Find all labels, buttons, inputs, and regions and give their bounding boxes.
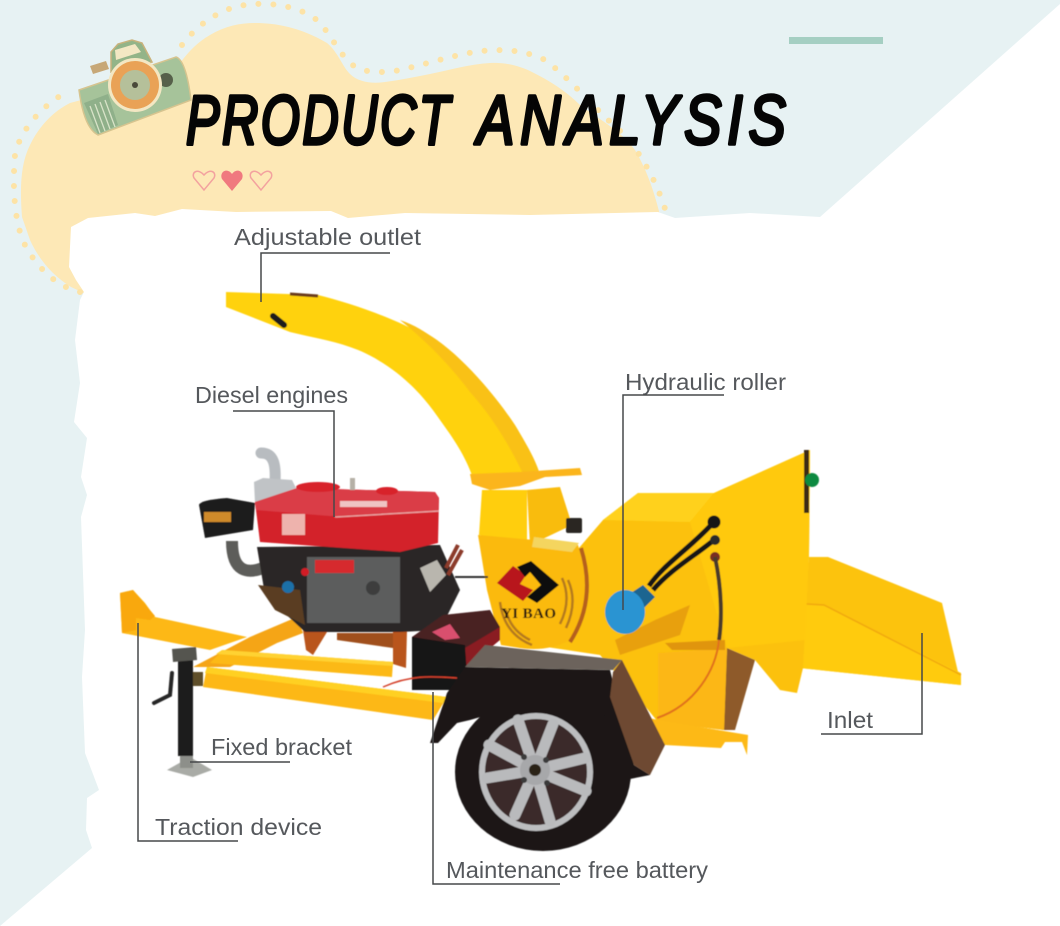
hopper inlet tray [790,557,961,685]
label: Diesel engines [195,382,348,517]
icon: three hearts [193,171,272,191]
logo: YI BAO [497,561,559,622]
label: Maintenance free battery: Maintenance free battery [446,857,709,883]
stand jack [154,647,212,777]
outlet transition [479,487,572,545]
label: Inlet: Inlet [827,707,874,733]
label: Inlet [821,633,922,734]
feed funnel body [500,450,810,730]
header blob: dotted outline [14,4,667,292]
tow frame [120,590,447,720]
flange [470,468,582,490]
blower housing [478,518,587,649]
base plate with hook [640,716,748,755]
label: Adjustable outlet [234,224,422,302]
logo: YI BAO: YI BAO [501,606,556,622]
label: Traction device: Traction device [155,814,322,840]
label: Hydraulic roller [623,369,786,610]
title [186,81,786,159]
fender [430,645,665,785]
diesel engine [199,453,488,648]
discharge chute [226,292,541,478]
header blob: cream shape [21,23,660,300]
title: ANALYSIS [473,82,786,159]
label: Fixed bracket: Fixed bracket [211,734,353,760]
accent bar [789,37,883,44]
wheel [455,693,631,851]
label: Diesel engines: Diesel engines [195,382,348,408]
green indicator light [804,450,819,513]
label: Hydraulic roller: Hydraulic roller [625,369,786,395]
wood chipper machine [120,292,961,851]
hydraulic motor and hoses [605,516,721,718]
label: Traction device [138,623,322,841]
label: Maintenance free battery [433,692,709,884]
lower box shadow [722,648,755,730]
icon: camera [79,40,191,135]
engine mounts [303,630,407,668]
battery [383,610,500,690]
title: PRODUCT [186,81,453,159]
label: Adjustable outlet: Adjustable outlet [234,224,422,250]
